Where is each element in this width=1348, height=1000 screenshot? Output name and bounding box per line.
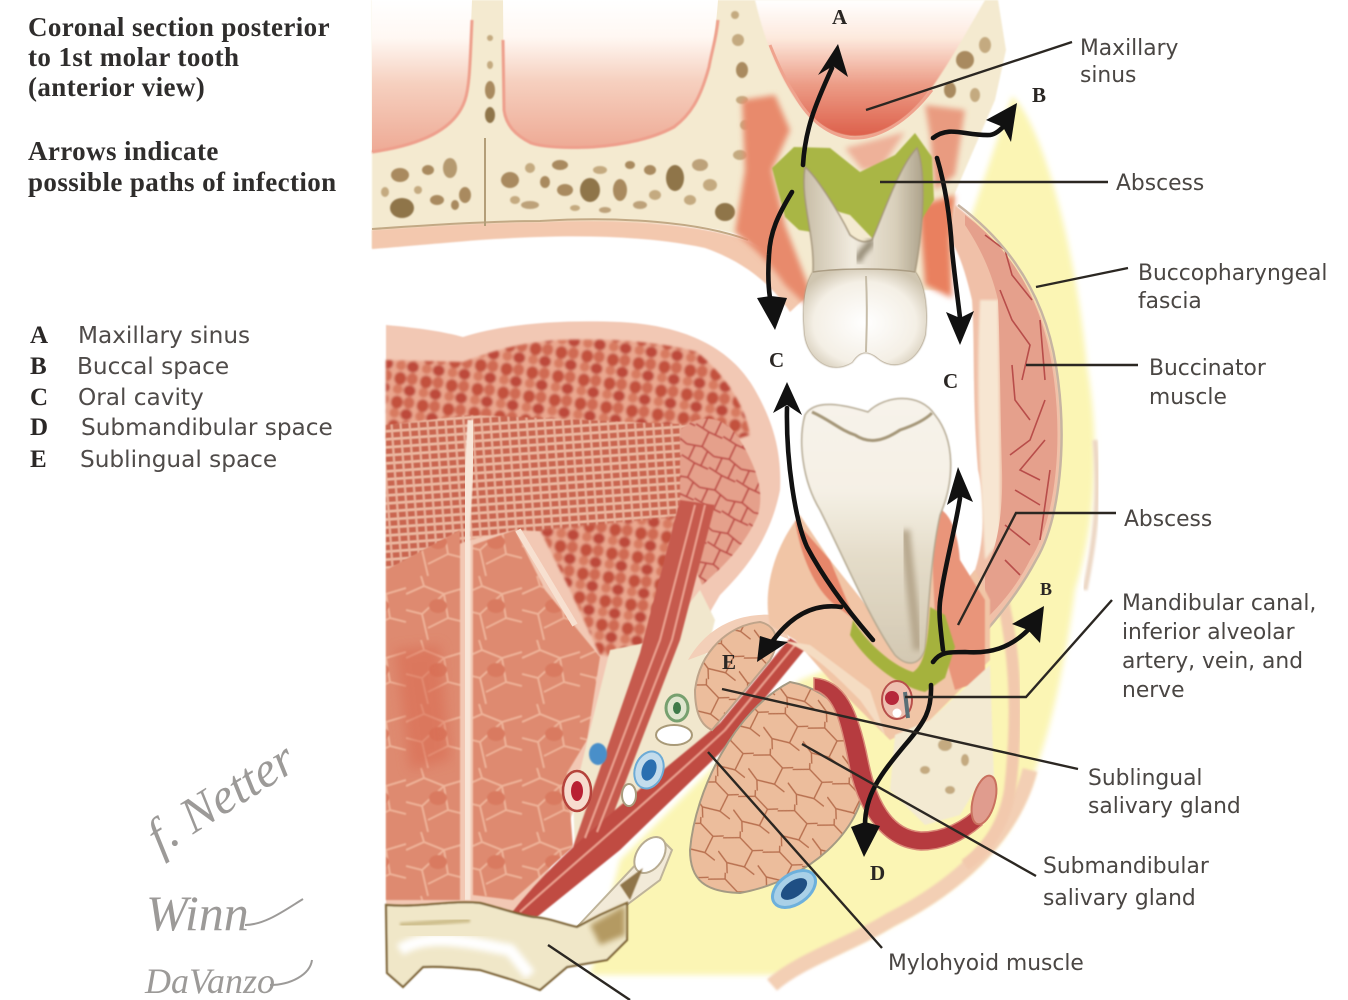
panel: middle nasal cavity xyxy=(503,0,718,148)
text: structure labels: salivary gland xyxy=(1088,794,1241,819)
text: structure labels: fascia xyxy=(1138,289,1202,314)
heading: arrows note: possible paths of infection xyxy=(28,167,337,197)
icon: mandibular canal vessels xyxy=(882,681,912,719)
inflamed tissue around upper root xyxy=(735,95,965,305)
heading: arrows note: Arrows indicate xyxy=(28,136,219,166)
legend: infection paths: Oral cavity xyxy=(78,384,204,411)
text: structure labels: Sublingual xyxy=(1088,766,1202,791)
text: structure labels xyxy=(888,36,1327,976)
text: arrow letters xyxy=(722,5,1052,885)
heading: section title: (anterior view) xyxy=(28,72,205,102)
arrow: to sublingual space E xyxy=(757,606,841,662)
bone marrow spaces xyxy=(381,11,991,221)
legend: infection paths: Sublingual space xyxy=(80,446,277,473)
text: structure labels: Mylohyoid muscle xyxy=(888,951,1084,976)
text: structure labels: Buccopharyngeal xyxy=(1138,261,1327,286)
arrow: to maxillary sinus A xyxy=(803,44,848,165)
arrow: to oral cavity C upper right xyxy=(937,158,974,345)
text: structure labels: salivary gland xyxy=(1043,886,1196,911)
arrow: to buccal space B upper xyxy=(933,103,1017,142)
text: structure labels: Maxillary xyxy=(1080,36,1179,61)
median septum xyxy=(466,420,472,900)
text: structure labels: sinus xyxy=(1080,63,1136,88)
panel: submandibular salivary gland xyxy=(690,682,865,893)
text: structure labels: artery, vein, and xyxy=(1122,649,1303,674)
text: structure labels: Buccinator xyxy=(1149,356,1266,381)
text: arrow letters: C xyxy=(943,369,958,393)
text: artist signatures: f. Netter xyxy=(136,730,305,864)
panel: buccinator cheek muscle xyxy=(950,205,1062,632)
heading: section title: Coronal section posterior xyxy=(28,12,330,42)
text: structure labels: Submandibular xyxy=(1043,854,1209,879)
text: arrow letters: A xyxy=(832,5,848,29)
text: structure labels: inferior alveolar xyxy=(1122,620,1295,645)
panel: cheek subcutaneous fat xyxy=(590,96,1097,985)
text: structure labels: nerve xyxy=(1122,678,1184,703)
text: arrow letters: C xyxy=(769,348,784,372)
panel: lower abscess xyxy=(850,607,955,692)
icon: upper molar tooth xyxy=(804,148,926,367)
arrow: to oral cavity C lower right xyxy=(940,467,973,650)
text: arrow letters: D xyxy=(870,861,885,885)
lateral lobes xyxy=(680,419,760,585)
legend: infection paths: Maxillary sinus xyxy=(78,322,250,349)
lower lobes xyxy=(386,530,460,900)
panel: tongue xyxy=(386,321,780,915)
text: structure labels: Abscess xyxy=(1116,171,1204,196)
text: artist signatures xyxy=(136,730,312,1000)
icon: vessels near tongue xyxy=(563,695,822,915)
text: structure labels: Mandibular canal, xyxy=(1122,591,1316,616)
panel: lower jaw gum tissue xyxy=(768,507,994,825)
text: arrow letters: B xyxy=(1032,83,1046,107)
text: arrow letters: E xyxy=(722,650,736,674)
panel: facial artery xyxy=(814,678,982,850)
legend: infection paths xyxy=(30,322,333,473)
panel: maxillary sinus xyxy=(755,0,985,138)
text: structure labels: muscle xyxy=(1149,385,1227,410)
text: structure labels: Abscess xyxy=(1124,507,1212,532)
panel: sublingual salivary gland xyxy=(688,615,790,730)
panel: cream tissue with vessels xyxy=(573,590,720,850)
red fibers lower xyxy=(540,515,690,660)
legend: infection paths: C xyxy=(30,384,48,411)
legend: infection paths: E xyxy=(30,446,47,473)
heading: section title: to 1st molar tooth xyxy=(28,42,239,72)
panel: genioglossus fan muscle and mylohyoid xyxy=(510,500,806,917)
panel: maxilla bone xyxy=(372,0,1006,312)
text: arrow letters: B xyxy=(1040,579,1052,599)
legend: infection paths: A xyxy=(30,322,48,349)
panel: lower molar tooth xyxy=(802,398,951,663)
panel: upper abscess xyxy=(772,133,934,250)
legend: infection paths: Submandibular space xyxy=(81,414,333,441)
arrow: to buccal space B lower xyxy=(933,606,1044,662)
legend: infection paths: Buccal space xyxy=(77,353,229,380)
text: artist signatures: DaVanzo xyxy=(144,961,275,1000)
panel: mandible bone and duct xyxy=(386,831,672,990)
arrow: to oral cavity C upper left xyxy=(757,192,792,330)
upper red fibers xyxy=(386,340,750,480)
legend: infection paths: D xyxy=(30,414,48,441)
arrow: to submandibular space D xyxy=(851,685,931,857)
panel: left nasal cavity xyxy=(372,0,472,152)
text: artist signatures: Winn xyxy=(146,885,249,941)
cross-hatched fibers xyxy=(386,415,700,570)
leader lines xyxy=(548,42,1138,1000)
icon: facial vessel xyxy=(967,773,1001,827)
legend: infection paths: B xyxy=(30,353,47,380)
arrow: to oral cavity C lower left xyxy=(773,382,873,640)
